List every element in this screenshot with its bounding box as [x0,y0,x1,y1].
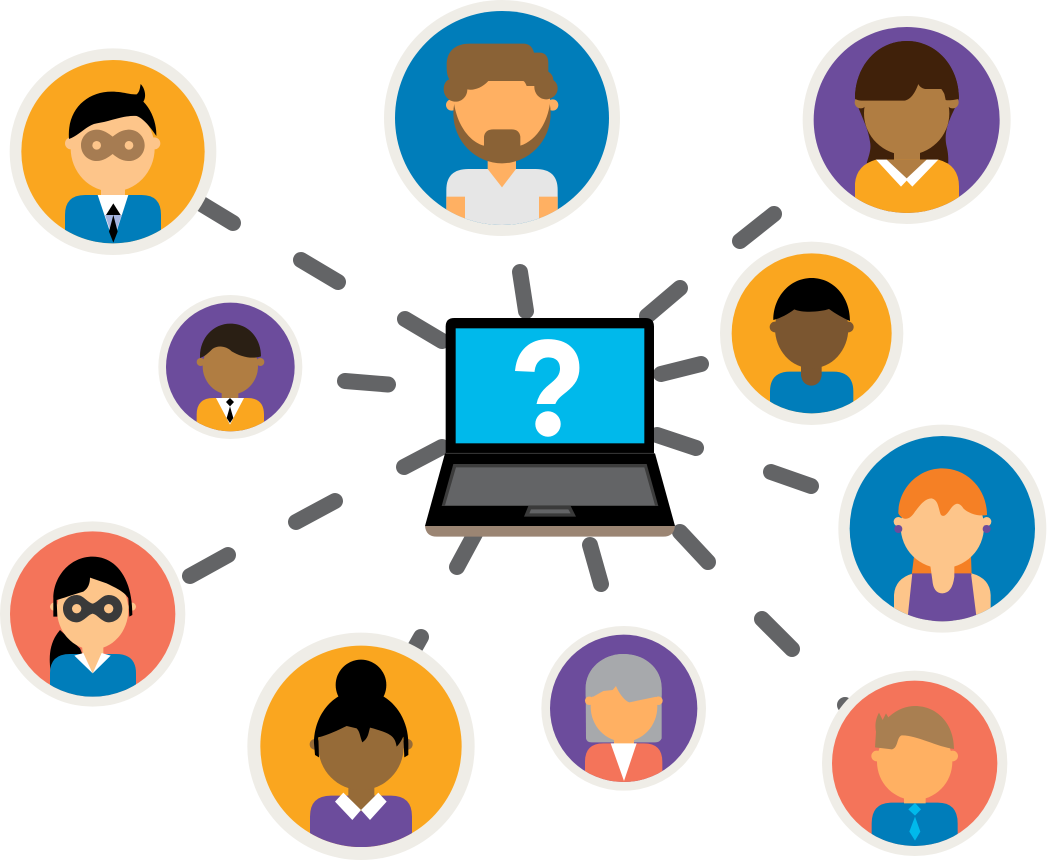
person 3: woman with long dark hair and orange top [803,16,1011,224]
person 9: woman with ponytail and dark glasses [0,521,185,707]
person 5: red-haired woman in purple tank top [838,425,1046,633]
person 8: woman with hair bun and purple sweater [247,633,475,860]
connector dashes radiating from laptop [190,203,862,722]
person 7: grey-haired woman in coral jacket [541,626,706,791]
person 4: man with short black hair and blue shirt [720,242,903,425]
person 6: man with brown quiff and cyan tie [822,671,1007,856]
question mark [515,339,580,437]
laptop with question mark on screen [425,312,675,537]
person 1: man with glasses and blue suit [10,48,216,255]
person 2: bearded man in white t-shirt [384,0,620,236]
question mark: ? [511,312,585,467]
person 10: man in orange sweater and black tie [158,295,302,439]
